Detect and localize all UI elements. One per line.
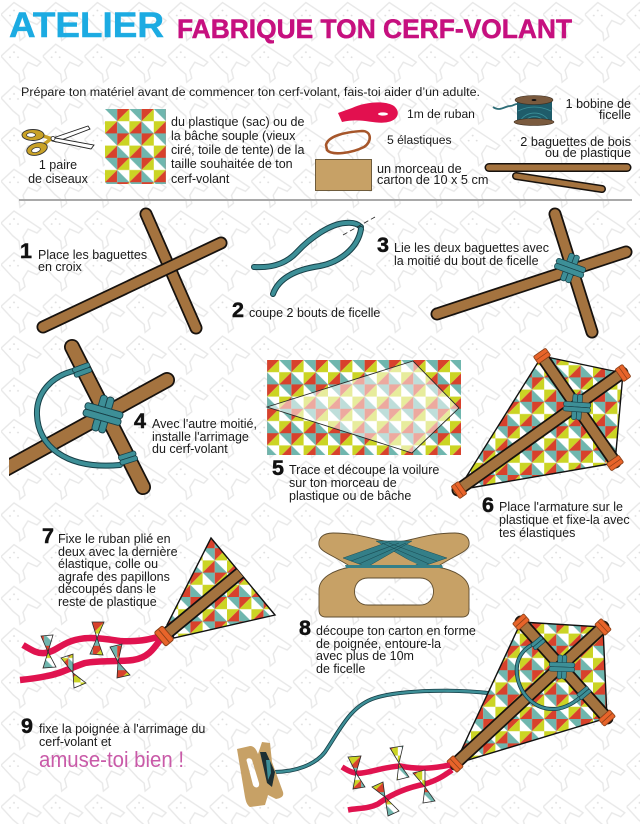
label: plastic sheet: cerf-volant (171, 172, 230, 186)
number 9: 9 (21, 714, 33, 738)
icon: tied sticks (437, 214, 626, 332)
text: step 7: deux avec la dernière (58, 545, 178, 559)
icon: kite tail with ribbons (20, 538, 275, 688)
step 2 (232, 217, 380, 322)
label: plastic sheet: taille souhaitée de ton (171, 157, 293, 171)
text: step 7: reste de plastique (58, 595, 157, 609)
text: step 6: tes élastiques (499, 526, 575, 540)
subtitle: fabrique ton cerf-volant: FABRIQUE TON CERF-VOLANT (177, 14, 572, 44)
text: step 3: Lie les deux baguettes avec (394, 241, 549, 255)
callout: amuse-toi bien: amuse-toi bien ! (39, 747, 184, 772)
icon: scissors (22, 126, 94, 158)
text: step 9: cerf-volant et (39, 735, 112, 749)
text: step 1: Place les baguettes (38, 248, 147, 262)
text: step 7: élastique, colle ou (58, 557, 158, 571)
label: sticks: ou de plastique (545, 146, 631, 160)
number 8: 8 (299, 616, 311, 640)
text: step 2: coupe 2 bouts de ficelle (249, 306, 380, 320)
icon: cut string (254, 217, 375, 294)
text: step 4: du cerf-volant (152, 442, 228, 456)
step 3 (377, 214, 626, 332)
step 8 (299, 533, 476, 676)
text: step 8: avec plus de 10m (316, 649, 414, 663)
step 6 (451, 348, 631, 540)
text: step 4: Avec l'autre moitié, (152, 417, 257, 431)
icon: cardboard (316, 160, 372, 190)
text: step 5: plastique ou de bâche (289, 489, 411, 503)
label: spool: 1 bobine de (566, 97, 631, 111)
text: step 9: fixe la poignée à l'arrimage du (39, 722, 205, 736)
label: rubber bands: 5 élastiques (387, 133, 452, 147)
label: cardboard: un morceau de (377, 162, 462, 176)
number 5: 5 (272, 456, 284, 480)
title: atelier: ATELIER (9, 6, 164, 45)
text: step 3: la moitié du bout de ficelle (394, 254, 539, 268)
step 4 (0, 347, 257, 487)
label: plastic sheet: la bâche souple (vieux (171, 129, 296, 143)
step 7 (20, 524, 275, 688)
number 4: 4 (134, 409, 146, 433)
text: step 7: découpés dans le (58, 582, 156, 596)
text: step 8: découpe ton carton en forme (316, 624, 476, 638)
icon: finished kite with handle (237, 614, 616, 816)
icon: rubber band (326, 131, 370, 153)
text: step 8: de ficelle (316, 662, 365, 676)
label: spool: ficelle (599, 108, 631, 122)
step 5 (267, 360, 461, 503)
intro text: Prépare ton matériel avant de commencer ton cerf-volant, fais-toi aider d’un adulte. (21, 85, 480, 99)
number 2: 2 (232, 298, 244, 322)
text: step 6: plastique et fixe-la avec (499, 513, 630, 527)
label: scissors: de ciseaux (28, 172, 89, 186)
label: ribbon: 1m de ruban (407, 107, 475, 121)
icon: ribbon (338, 102, 398, 123)
label: scissors: 1 paire (39, 158, 77, 172)
chart: plastic sheet with sail outline (267, 360, 461, 455)
label: plastic sheet: du plastique (sac) ou de (171, 115, 304, 129)
number 6: 6 (482, 493, 494, 517)
text: step 5: Trace et découpe la voilure (289, 463, 439, 477)
text: step 7: Fixe le ruban plié en (58, 532, 171, 546)
icon: bridle on sticks (0, 347, 167, 487)
number 1: 1 (20, 239, 32, 263)
text: step 6: Place l'armature sur le (499, 500, 623, 514)
text: step 5: sur ton morceau de (289, 476, 397, 490)
number 7: 7 (42, 524, 54, 548)
icon: framed kite (451, 348, 631, 499)
label: plastic sheet: ciré, toile de tente) de la (171, 143, 304, 157)
number 3: 3 (377, 233, 389, 257)
step 9 (21, 614, 616, 816)
label: sticks: 2 baguettes de bois (520, 135, 631, 149)
label: cardboard: carton de 10 x 5 cm (377, 173, 488, 187)
icon: spool of string (493, 96, 554, 126)
icon: crossed sticks (43, 214, 221, 328)
icon: cardboard handle with string (319, 533, 469, 617)
text: step 8: de poignée, entoure-la (316, 637, 441, 651)
icon: two sticks (489, 168, 627, 189)
panel: materials (22, 96, 631, 190)
swatch: plastic sheet (105, 109, 166, 184)
step 1 (20, 214, 221, 328)
text: step 7: agrafe des papillons (58, 570, 170, 584)
text: step 1: en croix (38, 260, 83, 274)
text: step 4: installe l'arrimage (152, 430, 249, 444)
